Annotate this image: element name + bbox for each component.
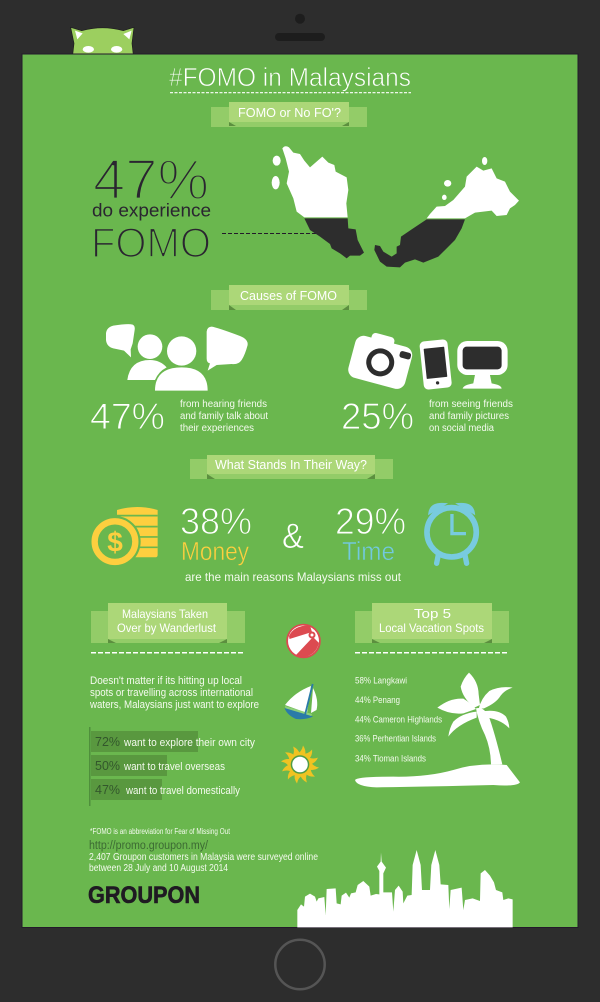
footnote: *FOMO is an abbreviation for Fear of Missing Out (90, 827, 231, 836)
bar: 72%: 72% (95, 734, 120, 749)
icon: sailboat (284, 684, 317, 719)
list: top 5 spots: 36% Perhentian Islands (355, 734, 436, 744)
icon: people talking (106, 324, 248, 391)
bar chart: travel desires (89, 727, 256, 806)
banner: Causes of FOMO (211, 285, 367, 310)
logo: Groupon: GROUPON (88, 882, 200, 909)
bar: 50%: want to travel overseas (123, 761, 226, 773)
paragraph: wanderlust: waters, Malaysians just want to explore (89, 699, 259, 711)
bar: 72% (91, 731, 256, 752)
stat: 47% hearing friends: 47% (90, 396, 165, 437)
banner: Wanderlust (91, 603, 245, 653)
stat: 38% Money (180, 501, 252, 566)
bar: 50%: 50% (95, 758, 120, 773)
icon: sun (281, 745, 319, 784)
icon: beach ball (286, 624, 321, 658)
bar: 47%: want to travel domestically (125, 785, 241, 797)
icon: phone speaker (275, 33, 325, 41)
icon: palm tree island (355, 673, 520, 787)
survey note (89, 852, 318, 874)
survey note: between 28 July and 10 August 2014 (89, 863, 228, 874)
caption: main reasons: are the main reasons Malaysians miss out (185, 570, 402, 584)
map of Malaysia (272, 146, 519, 267)
icon: phone camera (295, 14, 305, 24)
stat: 25% seeing pictures (341, 396, 513, 437)
banner: Wanderlust: Malaysians Taken (122, 607, 208, 621)
banner: What Stands In Their Way? (190, 455, 393, 479)
list: top 5 spots (355, 676, 442, 763)
skyline (297, 850, 513, 927)
banner: FOMO or No FO'?: FOMO or No FO'? (238, 106, 341, 120)
ampersand: & (282, 517, 304, 556)
icons: camera, phone, monitor (346, 328, 508, 391)
list: top 5 spots: 34% Tioman Islands (355, 753, 426, 763)
stat: 47% hearing friends (90, 396, 268, 437)
banner: Top 5 Local Vacation Spots: Top 5 (414, 606, 451, 621)
survey note: 2,407 Groupon customers in Malaysia were surveyed online (89, 852, 318, 863)
stat: 47% hearing friends: their experiences (180, 423, 254, 434)
list: top 5 spots: 44% Cameron Highlands (355, 714, 442, 724)
list: top 5 spots: 58% Langkawi (355, 676, 407, 686)
stat: 47% hearing friends: from hearing friends (180, 399, 267, 410)
home button (275, 940, 325, 989)
stat: 29% Time (335, 501, 406, 566)
banner: Causes of FOMO: Causes of FOMO (240, 289, 337, 303)
icon: coins: $ (107, 527, 123, 558)
stat: 47% hearing friends: and family talk about (180, 411, 268, 422)
stat: 38% Money: 38% (180, 501, 252, 542)
stat: 25% seeing pictures: 25% (341, 396, 414, 437)
icon: alarm clock (427, 504, 476, 563)
banner: What Stands In Their Way?: What Stands In Their Way? (215, 458, 367, 472)
source link: http://promo.groupon.my/ (89, 840, 209, 852)
stat: 25% seeing pictures: and family pictures (429, 411, 509, 422)
stat: 29% Time: 29% (335, 501, 406, 542)
banner: Wanderlust: Over by Wanderlust (117, 621, 217, 635)
stat: 25% seeing pictures: from seeing friends (429, 399, 513, 410)
bar: 47%: 47% (95, 782, 120, 797)
banner: Top 5 Local Vacation Spots: Local Vacation Spots (379, 621, 484, 635)
stat: 47% do experience FOMO: FOMO (91, 219, 211, 266)
title: #FOMO in Malaysians (169, 62, 411, 92)
stat: 25% seeing pictures: on social media (429, 423, 494, 434)
bar: 72%: want to explore their own city (123, 737, 256, 749)
list: top 5 spots: 44% Penang (355, 695, 400, 705)
paragraph: wanderlust: spots or travelling across international (90, 687, 253, 699)
bar: 47% (91, 779, 241, 800)
stat: 38% Money: Money (181, 536, 249, 566)
banner: FOMO or No FO'? (211, 102, 367, 127)
icon: coins (89, 507, 158, 567)
stat: 29% Time: Time (342, 536, 395, 566)
stat: 47% do experience FOMO: do experience (92, 200, 211, 220)
stat: 47% do experience FOMO: 47% (93, 148, 209, 212)
stat: 47% do experience FOMO (91, 148, 211, 266)
paragraph: wanderlust (89, 675, 259, 711)
icon: android cat peeking (71, 27, 134, 55)
banner: Top 5 Local Vacation Spots (355, 603, 509, 653)
dashed connector (222, 232, 318, 234)
paragraph: wanderlust: Doesn't matter if its hitting up local (90, 675, 242, 687)
bar: 50% (91, 755, 226, 776)
